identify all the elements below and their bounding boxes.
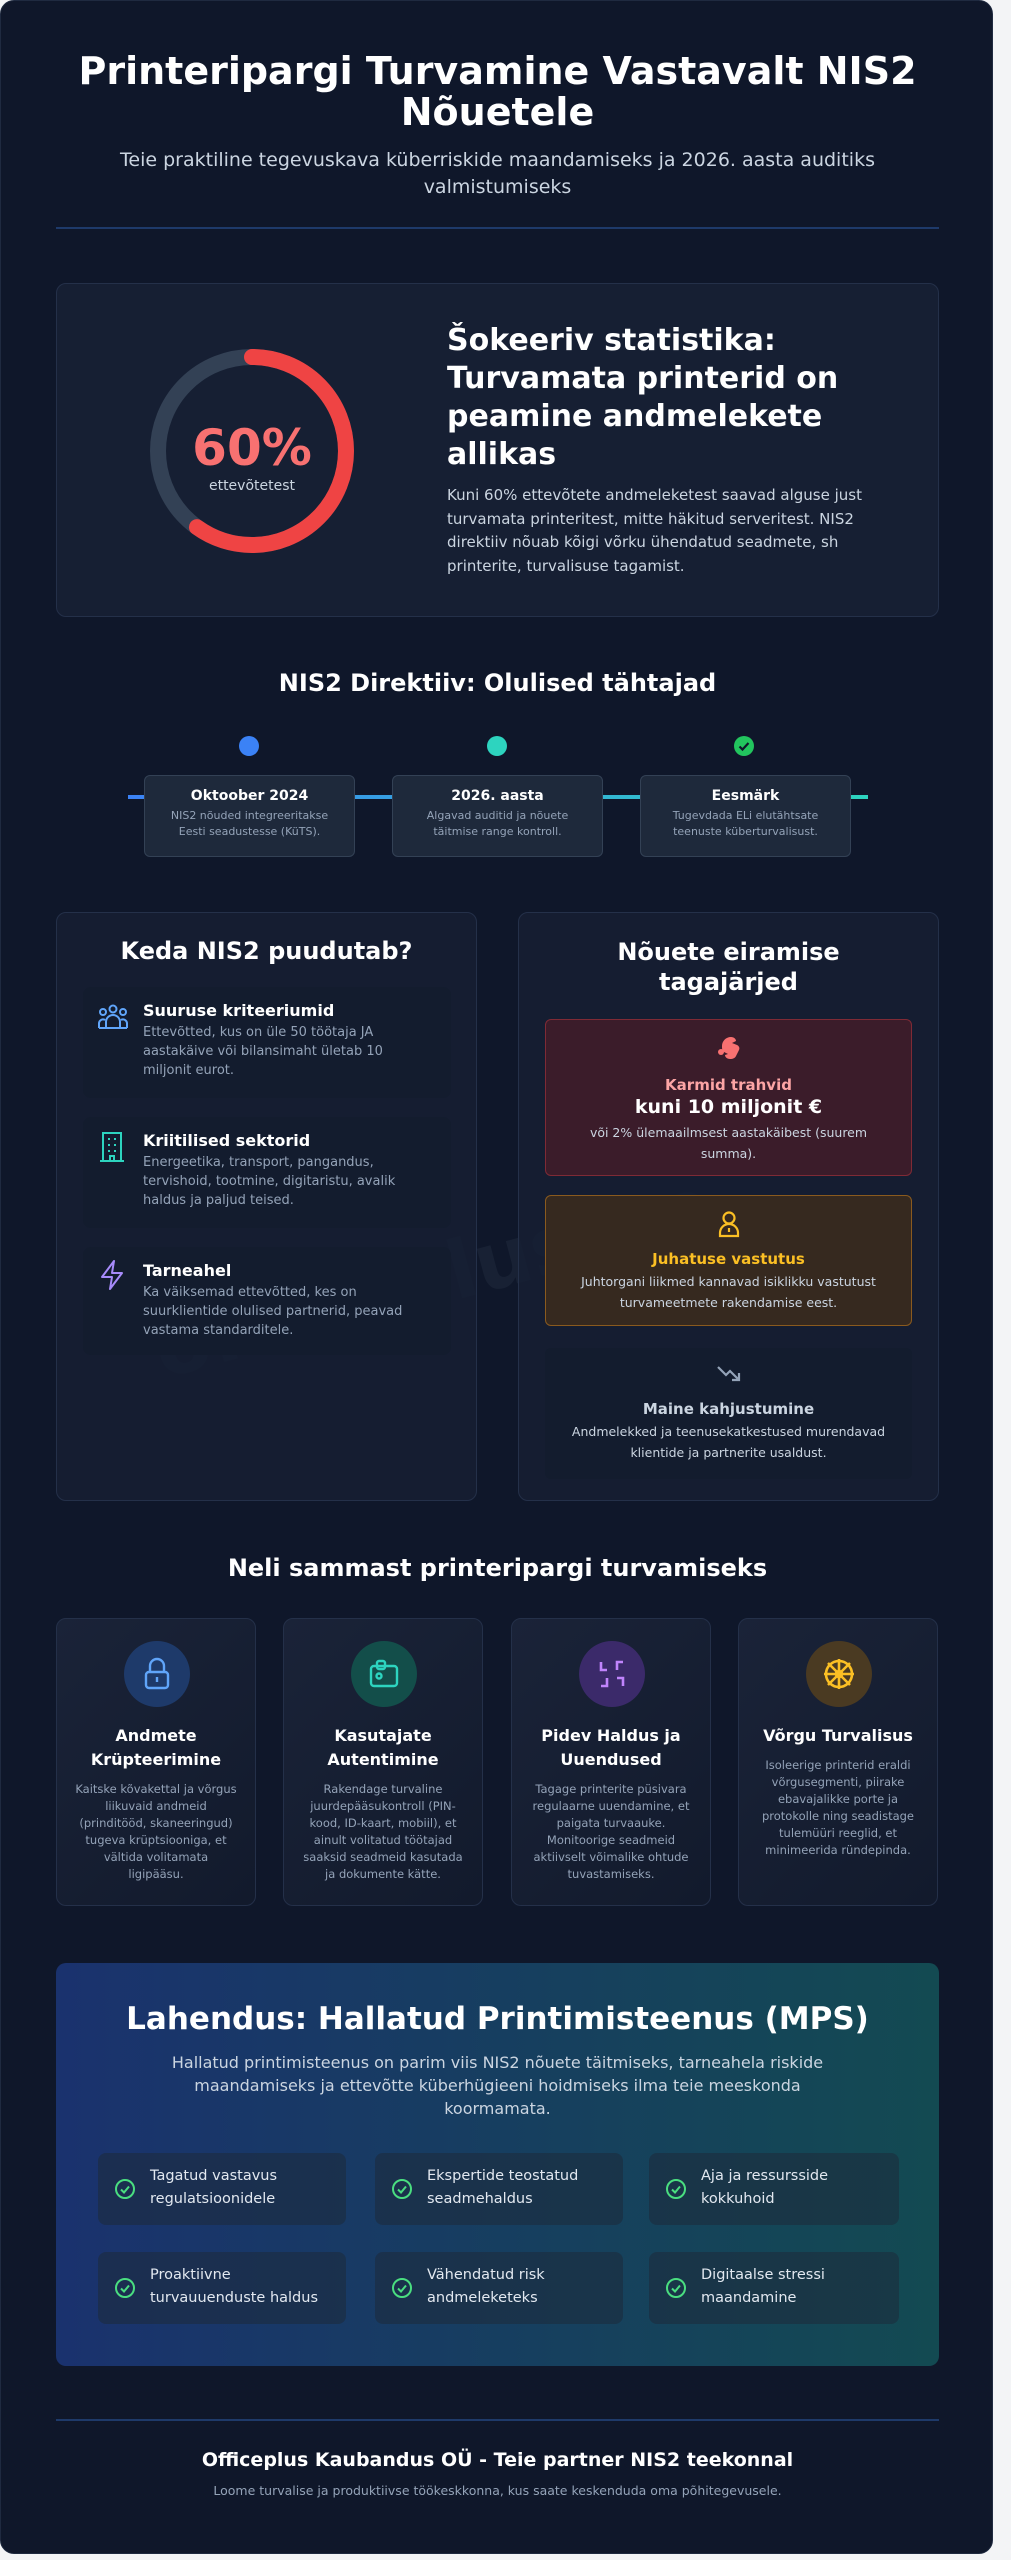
footer subtitle: Loome turvalise ja produktiivse töökeskkonna, kus saate keskenduda oma põhitegevusele.: [213, 2483, 782, 2498]
panel: MPS solution: [56, 1963, 939, 2366]
icon: dot teal: [487, 736, 507, 756]
item: supply chain: Ka väiksemad ettevõtted, kes on suurklientide olulised partnerid, peavad vastama standarditele.: [143, 1285, 402, 1338]
feature: compliance: [98, 2153, 346, 2225]
timeline: Oktoober 2024: [144, 775, 355, 857]
chart: donut 60%: 60%: [192, 419, 312, 477]
item: size: [83, 987, 451, 1098]
timeline: Eesmärk: Eesmärk: [712, 788, 779, 804]
callout: management liability: Juhatuse vastutus: [652, 1250, 805, 1268]
heading: Keda NIS2 puudutab?: [121, 937, 412, 965]
callout: management liability: [545, 1195, 912, 1326]
item: sectors: Energeetika, transport, pangandus, tervishoid, tootmine, digitaristu, avalik haldus ja paljud teised.: [143, 1155, 395, 1208]
subtitle: Teie praktiline tegevuskava küberriskide maandamiseks ja 2026. aasta auditiks valmistumiseks: [120, 149, 875, 198]
timeline: Eesmärk: teenuste küberturvalisust.: [673, 825, 818, 838]
pillar: network: [738, 1618, 938, 1906]
feature: digital stress: [649, 2252, 899, 2324]
heading: timeline: NIS2 Direktiiv: Olulised tähtajad: [279, 669, 716, 697]
panel: who is affected: [56, 912, 477, 1501]
panel: consequences: [518, 912, 939, 1501]
item: supply chain: Tarneahel: [143, 1261, 231, 1280]
title: Printeripargi Turvamine Vastavalt NIS2 Nõuetele: [78, 49, 917, 134]
heading: Nõuete eiramise: [617, 938, 840, 966]
item: sectors: Kriitilised sektorid: [143, 1131, 310, 1150]
pillar: maintenance: [511, 1618, 711, 1906]
pillar: maintenance: Pidev Haldus ja Uuendused: [541, 1726, 681, 1769]
heading: MPS: Lahendus: Hallatud Printimisteenus (MPS): [126, 2001, 869, 2037]
callout: reputation: Andmelekked ja teenusekatkestused murendavad klientide ja partnerite usaldust.: [572, 1424, 885, 1460]
heading: [617, 938, 840, 996]
callout: reputation: Maine kahjustumine: [643, 1400, 814, 1418]
heading: tagajärjed: [659, 968, 798, 996]
pillar: encryption: Andmete Krüpteerimine: [91, 1726, 221, 1769]
pillar: authentication: Kasutajate Autentimine: [327, 1726, 439, 1769]
callout: fines: või 2% ülemaailmsest aastakäibest (suurem summa).: [590, 1125, 867, 1161]
watermark: officeplus.ee: [144, 1158, 722, 1397]
footer title: Officeplus Kaubandus OÜ - Teie partner NIS2 teekonnal: [202, 2449, 793, 2471]
text: statistics body: Kuni 60% ettevõtete andmeleketest saavad alguse just turvamata printeritest, mitte häkitud serveritest. NIS2 direktiiv nõuab kõigi võrku ühendatud seadmete, sh printerite, turvalisuse tagamist.: [447, 486, 862, 574]
timeline: 2026: 2026. aasta: [451, 788, 544, 804]
text: MPS description: Hallatud printimisteenus on parim viis NIS2 nõuete täitmiseks, tarneahela riskide maandamiseks ja ettevõtte küberhügieeni hoidmiseks ilma teie meeskonda koormamata.: [172, 2053, 823, 2118]
pillar: maintenance: Tagage printerite püsivara regulaarne uuendamine, et paigata turvaauke. Monitoorige seadmeid aktiivselt võimalike ohtude tuvastamiseks.: [533, 1782, 689, 1881]
item: size: Ettevõtted, kus on üle 50 töötaja JA aastakäive või bilansimaht ületab 10 miljonit eurot.: [143, 1025, 383, 1078]
item: sectors: [83, 1117, 451, 1228]
feature: savings: [649, 2153, 899, 2225]
feature: expert management: [375, 2153, 623, 2225]
timeline: Oktoober 2024: Oktoober 2024: [191, 788, 308, 804]
item: supply chain: [83, 1247, 451, 1355]
timeline: [128, 736, 868, 857]
timeline: 2026: täitmise range kontroll.: [433, 825, 562, 838]
feature: reduced risk: Vähendatud risk andmeleketeks: [427, 2267, 545, 2306]
panel: statistics: [56, 283, 939, 617]
feature: proactive: [98, 2252, 346, 2324]
timeline: 2026: [392, 775, 603, 857]
feature: proactive: Proaktiivne turvauuenduste haldus: [150, 2267, 318, 2306]
pillar: encryption: Kaitske kõvakettal ja võrgus liikuvaid andmeid (prinditööd, skaneeringud) tugeva krüptsiooniga, et vältida volitamata ligipääsu.: [75, 1782, 237, 1881]
timeline: Eesmärk: Tugevdada ELi elutähtsate: [673, 809, 818, 822]
icon: check green: [734, 736, 754, 756]
feature: savings: Aja ja ressursside kokkuhoid: [701, 2168, 828, 2207]
feature: compliance: Tagatud vastavus regulatsioonidele: [150, 2168, 277, 2207]
pillar: network: Isoleerige printerid eraldi võrgusegmenti, piirake ebavajalikke porte ja protokolle ning seadistage tulemüüri reeglid, et minimeerida ründepinda.: [762, 1758, 914, 1857]
item: size: Suuruse kriteeriumid: [143, 1001, 334, 1020]
feature: expert management: Ekspertide teostatud seadmehaldus: [427, 2168, 578, 2207]
callout: fines: kuni 10 miljonit €: [635, 1096, 822, 1118]
pillar: network: Võrgu Turvalisus: [763, 1726, 913, 1745]
callout: management liability: Juhtorgani liikmed kannavad isiklikku vastutust turvameetmete rakendamise eest.: [581, 1274, 876, 1310]
timeline: Eesmärk: [640, 775, 851, 857]
feature: reduced risk: [375, 2252, 623, 2324]
chart: donut 60%: [150, 349, 354, 553]
pillar: encryption: [56, 1618, 256, 1906]
pillar: authentication: [283, 1618, 483, 1906]
timeline: Oktoober 2024: Eesti seadustesse (KüTS).: [179, 825, 320, 838]
callout: fines: Karmid trahvid: [665, 1076, 792, 1094]
heading: four pillars: Neli sammast printeripargi turvamiseks: [228, 1554, 767, 1582]
icon: dot blue: [239, 736, 259, 756]
pillar: authentication: Rakendage turvaline juurdepääsukontroll (PIN-kood, ID-kaart, mobiil), et ainult volitatud töötajad saaksid seadmeid kasutada ja dokumente kätte.: [303, 1782, 463, 1881]
callout: fines: [545, 1019, 912, 1176]
heading: statistics: Šokeeriv statistika: Turvamata printerid on peamine andmelekete allikas: [447, 323, 838, 472]
chart: donut 60%: ettevõtetest: [209, 478, 296, 494]
timeline: Oktoober 2024: NIS2 nõuded integreeritakse: [171, 809, 328, 822]
callout: reputation: [545, 1348, 912, 1479]
timeline: 2026: Algavad auditid ja nõuete: [427, 809, 568, 822]
feature: digital stress: Digitaalse stressi maandamine: [701, 2267, 825, 2306]
